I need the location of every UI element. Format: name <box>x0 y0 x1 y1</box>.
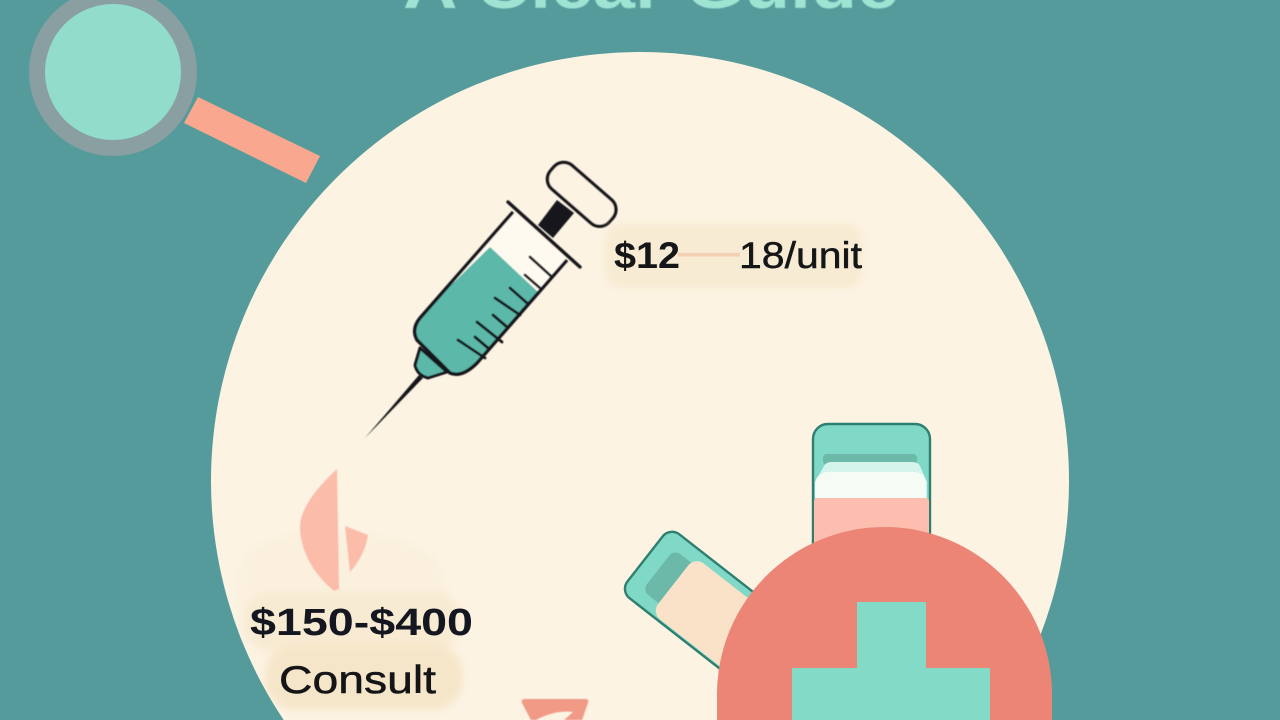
icon: peach leaf <box>300 469 368 591</box>
price label: consult: $150-$400 <box>250 602 473 644</box>
label highlight <box>605 224 863 288</box>
syringe plunger stem <box>538 200 574 238</box>
price label: consult: Consult <box>279 659 436 702</box>
icon: magnifying glass <box>37 0 320 183</box>
syringe plunger cap <box>544 160 618 229</box>
syringe needle <box>365 375 423 438</box>
consult label blobs <box>236 589 465 712</box>
syringe flange <box>508 202 580 267</box>
syringe barrel <box>452 212 568 292</box>
icon: upright vial <box>812 422 932 544</box>
price label: per unit: 18/unit <box>739 235 863 276</box>
icon: syringe <box>365 157 621 438</box>
vial dark band <box>823 454 917 465</box>
price label: per unit: $12 <box>614 235 680 276</box>
tilted vial dark band <box>646 552 692 603</box>
vial salmon layer <box>814 498 929 542</box>
price label: per unit <box>605 224 863 288</box>
central cream circle <box>211 52 1069 720</box>
vial light layers <box>815 462 927 498</box>
price label: consult <box>250 606 471 694</box>
syringe outline <box>415 212 567 374</box>
icon: bottom salmon shape <box>522 699 588 720</box>
icon: tilted vial <box>624 530 754 670</box>
syringe nozzle <box>415 348 447 378</box>
syringe liquid <box>415 246 538 374</box>
syringe ticks <box>458 257 552 358</box>
label dash <box>678 253 740 256</box>
badge: medical cross <box>717 527 1052 720</box>
tilted vial cream label <box>656 561 748 666</box>
